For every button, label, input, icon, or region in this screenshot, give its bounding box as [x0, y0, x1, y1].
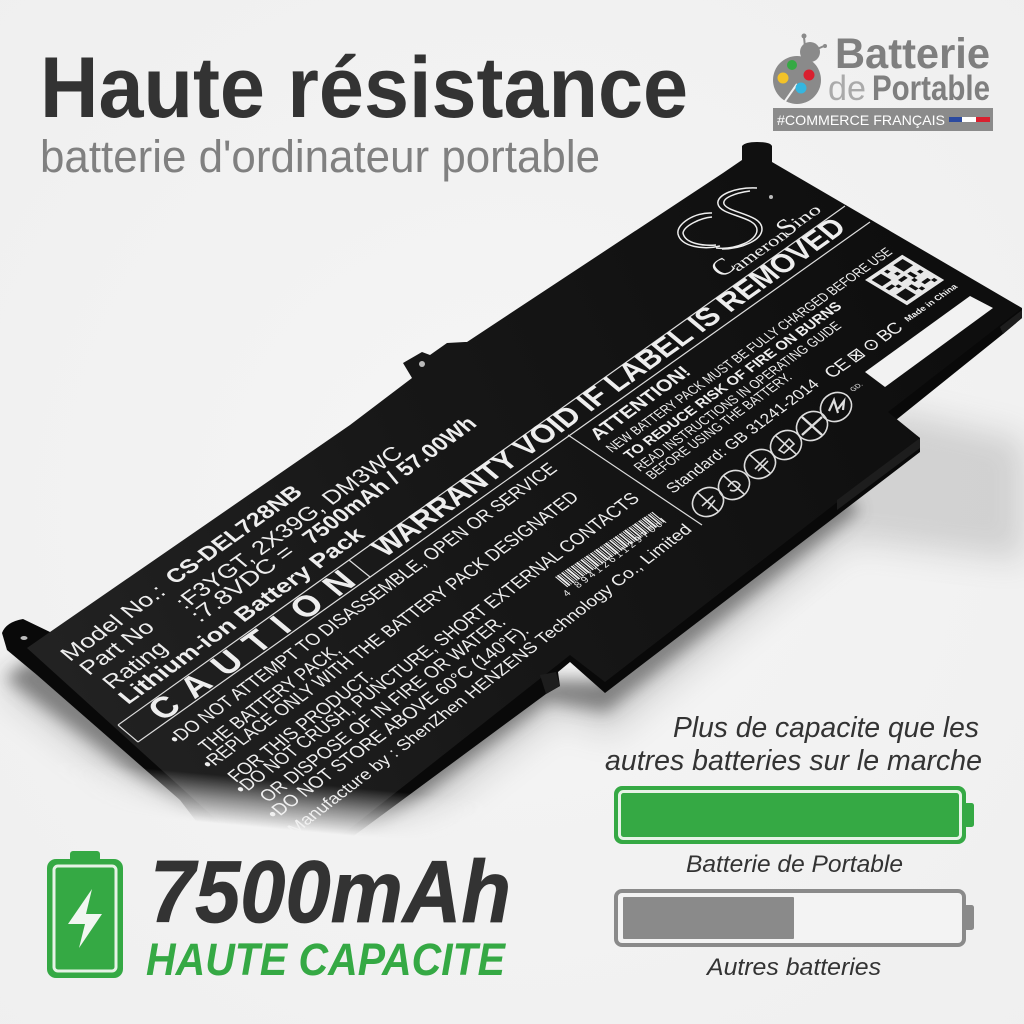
protrusion edge details — [540, 310, 1022, 694]
cameron sino logo: ino — [786, 201, 826, 231]
caution text: FOR THIS PRODUCT. — [224, 667, 378, 786]
caution heading: CAUTION — [140, 564, 364, 727]
logo wordmark portable: Portable — [872, 69, 990, 108]
barcode: 4 894126112970cl — [561, 517, 669, 599]
brand logo — [773, 30, 993, 131]
certification marks: CE ⊠ ⊙ BC — [820, 318, 907, 382]
model info: Model No.: — [55, 580, 171, 665]
icon: green battery with bolt — [47, 851, 123, 978]
attention text: READ INSTRUCTIONS IN OPERATING GUIDE — [630, 319, 844, 474]
logo wordmark: Batterie — [835, 30, 990, 78]
label: batterie de portable: Batterie de Portable — [686, 851, 903, 878]
model info: Rating — [97, 637, 173, 693]
battery label text — [55, 188, 993, 838]
caution text: OR DISPOSE OF IN FIRE OR WATER. — [256, 613, 511, 806]
white serial label — [865, 296, 993, 387]
cameron sino logo: ameron — [726, 226, 793, 275]
logo band text: #COMMERCE FRANÇAIS — [777, 112, 945, 128]
caution text: •DO NOT STORE ABOVE 60°C (140°F). — [263, 622, 534, 823]
gray battery bar — [616, 891, 974, 945]
model info: Part No — [74, 616, 160, 679]
capacity value: 7500mAh — [150, 842, 511, 941]
comparison heading: autres batteries sur le marche — [605, 745, 982, 777]
small mark: GD. — [849, 382, 865, 393]
made in china text: Made in China — [902, 282, 960, 323]
label: autres batteries: Autres batteries — [705, 954, 881, 981]
cameron sino logo: C — [704, 252, 741, 282]
comparison heading: Plus de capacite que les — [673, 712, 979, 744]
caution text: •DO NOT CRUSH, PUNCTURE, SHORT EXTERNAL CONTACTS — [231, 489, 644, 798]
caution text: •REPLACE ONLY WITH THE BATTERY PACK DESIGNATED — [198, 488, 584, 773]
attention text — [586, 245, 895, 497]
model info: CS-DEL728NB — [160, 481, 308, 588]
attention text: BEFORE USING THE BATTERY. — [642, 370, 795, 482]
caution text: Manufacture by : ShenZhen HENZENS Technology Co., Limited — [283, 521, 696, 838]
battery top surface — [27, 142, 1022, 868]
attention text: Standard: GB 31241-2014 — [663, 377, 823, 497]
logo wordmark second line: de — [828, 69, 866, 108]
subtitle: batterie d'ordinateur portable — [40, 131, 600, 182]
capacity caption: HAUTE CAPACITE — [146, 934, 507, 985]
soft shadows — [0, 410, 1024, 880]
title: Haute résistance — [40, 40, 688, 136]
caution text: THE BATTERY PACK, — [195, 641, 346, 756]
green battery bar — [614, 786, 974, 844]
attention text: NEW BATTERY PACK MUST BE FULLY CHARGED BEFORE USE — [602, 245, 895, 455]
icon: ladybug palette — [773, 34, 827, 104]
attention text: TO REDUCE RISK OF FIRE ON BURNS — [621, 299, 846, 463]
battery body side — [2, 308, 1022, 834]
model info: :F3YGT, 2X39G, DM3WC — [170, 441, 408, 613]
model info: 7500mAh / 57.00Wh — [297, 412, 482, 548]
comparison heading — [605, 712, 982, 777]
logo band — [773, 108, 993, 131]
model info: :7.8VDC = — [185, 540, 300, 626]
warranty heading: WARRANTY VOID IF LABEL IS REMOVED — [365, 212, 853, 562]
capacity block — [47, 842, 511, 985]
cameron sino logo — [678, 188, 826, 282]
comparison panel — [605, 712, 982, 981]
qr code — [865, 255, 944, 305]
mounting holes — [20, 361, 425, 640]
model info — [55, 412, 482, 708]
caution text: •DO NOT ATTEMPT TO DISASSEMBLE, OPEN OR SERVICE — [165, 460, 562, 748]
model info: Lithium-ion Battery Pack — [113, 523, 371, 708]
safety icons — [692, 392, 852, 518]
battery photo — [0, 142, 1024, 905]
cameron sino logo: S — [769, 213, 804, 241]
icon: french flag — [949, 117, 990, 122]
attention text: ATTENTION! — [586, 363, 696, 444]
label frame lines — [118, 206, 870, 742]
